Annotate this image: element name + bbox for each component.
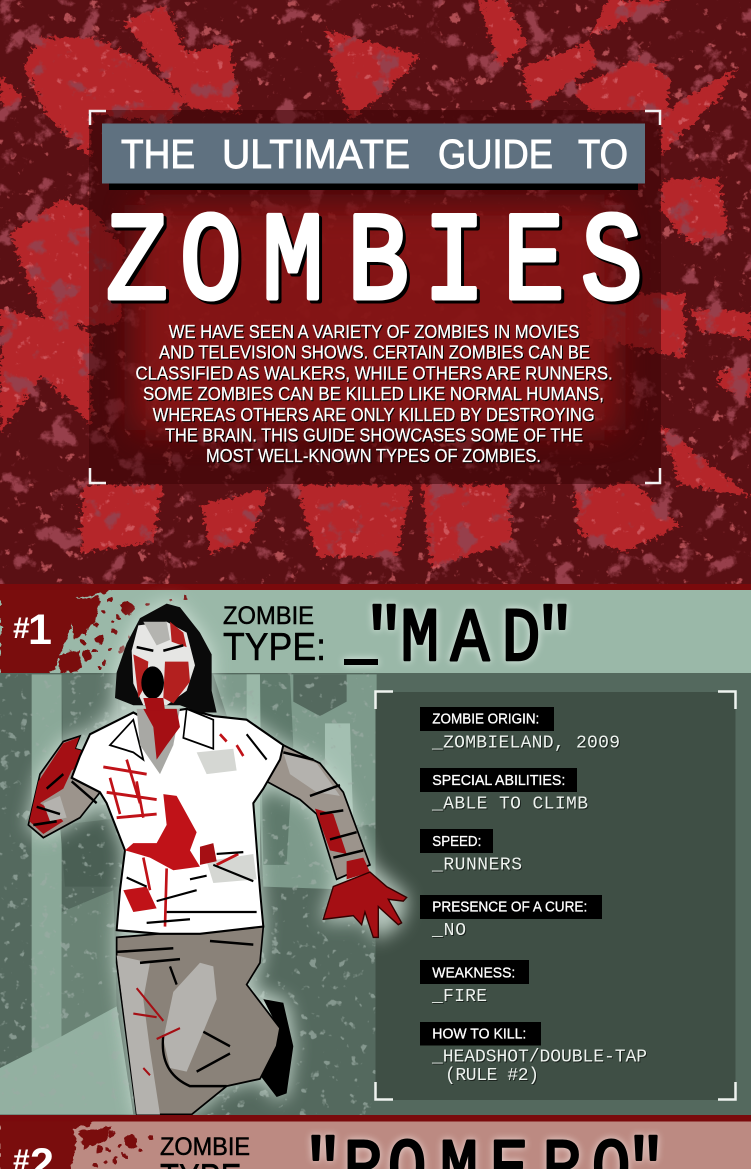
how to kill row: (RULE #2) — [445, 1066, 539, 1086]
section 1 name: mad: "MAD" — [365, 598, 574, 684]
hair — [115, 604, 217, 712]
presence of a cure row: _NO — [431, 921, 466, 941]
special abilities row — [420, 768, 588, 815]
darkened title overlay panel — [89, 110, 661, 484]
how to kill row: _HEADSHOT/DOUBLE-TAP — [431, 1048, 647, 1068]
section 1 heading: zombie type — [223, 602, 326, 669]
special abilities row: _ABLE TO CLIMB — [431, 795, 588, 815]
title banner: THE — [121, 131, 195, 177]
hero corner brackets — [90, 111, 660, 483]
weakness row — [420, 960, 529, 1007]
speed row — [420, 829, 522, 875]
section 1 number: # — [13, 612, 30, 645]
left arm — [28, 736, 100, 838]
section 2 header band — [0, 1122, 751, 1169]
divider strip above section 2 — [0, 1115, 751, 1122]
title banner — [102, 124, 645, 190]
section 1 details panel — [376, 692, 736, 1100]
title banner: GUIDE — [438, 131, 553, 177]
presence of a cure row: PRESENCE OF A CURE: — [432, 900, 587, 916]
weakness row: WEAKNESS: — [432, 965, 515, 981]
section 1 number — [13, 606, 52, 654]
title banner: ULTIMATE — [222, 131, 410, 177]
trousers and shoe — [117, 927, 293, 1114]
central red wash behind text — [135, 205, 615, 430]
presence of a cure row — [420, 895, 602, 941]
speed row: SPEED: — [432, 834, 481, 850]
zombie illustration — [28, 604, 407, 1114]
section 1 number: 1 — [28, 606, 52, 654]
weakness row: _FIRE — [431, 987, 487, 1007]
right arm — [267, 745, 407, 937]
intro paragraph — [136, 322, 613, 466]
hero background collage — [0, 0, 751, 586]
divider strip above section 1 — [0, 584, 751, 590]
intro paragraph: MOST WELL-KNOWN TYPES OF ZOMBIES. — [206, 446, 541, 466]
intro paragraph: WHEREAS OTHERS ARE ONLY KILLED BY DESTROYING — [153, 405, 595, 425]
special abilities row: SPECIAL ABILITIES: — [432, 773, 565, 789]
section 1 header band — [0, 590, 751, 673]
section 1 street background — [0, 673, 751, 1115]
how to kill row — [420, 1022, 647, 1086]
section 1 heading: zombie type: ZOMBIE — [223, 602, 314, 630]
title banner: TO — [578, 131, 628, 177]
zombie origin row: _ZOMBIELAND, 2009 — [431, 734, 620, 754]
neck — [137, 709, 180, 774]
intro paragraph: THE BRAIN. THIS GUIDE SHOWCASES SOME OF THE — [165, 426, 583, 446]
zombie origin row: ZOMBIE ORIGIN: — [432, 711, 539, 727]
section 1 heading: zombie type: TYPE: — [223, 626, 326, 669]
intro paragraph: WE HAVE SEEN A VARIETY OF ZOMBIES IN MOVIES — [169, 322, 579, 342]
face — [132, 622, 195, 711]
intro paragraph: AND TELEVISION SHOWS. CERTAIN ZOMBIES CAN BE — [159, 343, 590, 363]
section 2 heading: zombie type: ZOMBIE — [160, 1133, 250, 1161]
speed row: _RUNNERS — [431, 855, 522, 875]
title: zombies: ZOMBIES — [106, 195, 642, 336]
how to kill row: HOW TO KILL: — [432, 1026, 526, 1042]
zombie origin row — [420, 707, 620, 754]
section 2 number — [13, 1140, 54, 1169]
shirt — [72, 709, 283, 934]
intro paragraph: CLASSIFIED AS WALKERS, WHILE OTHERS ARE RUNNERS. — [136, 363, 613, 383]
intro paragraph: SOME ZOMBIES CAN BE KILLED LIKE NORMAL HUMANS, — [143, 384, 604, 404]
